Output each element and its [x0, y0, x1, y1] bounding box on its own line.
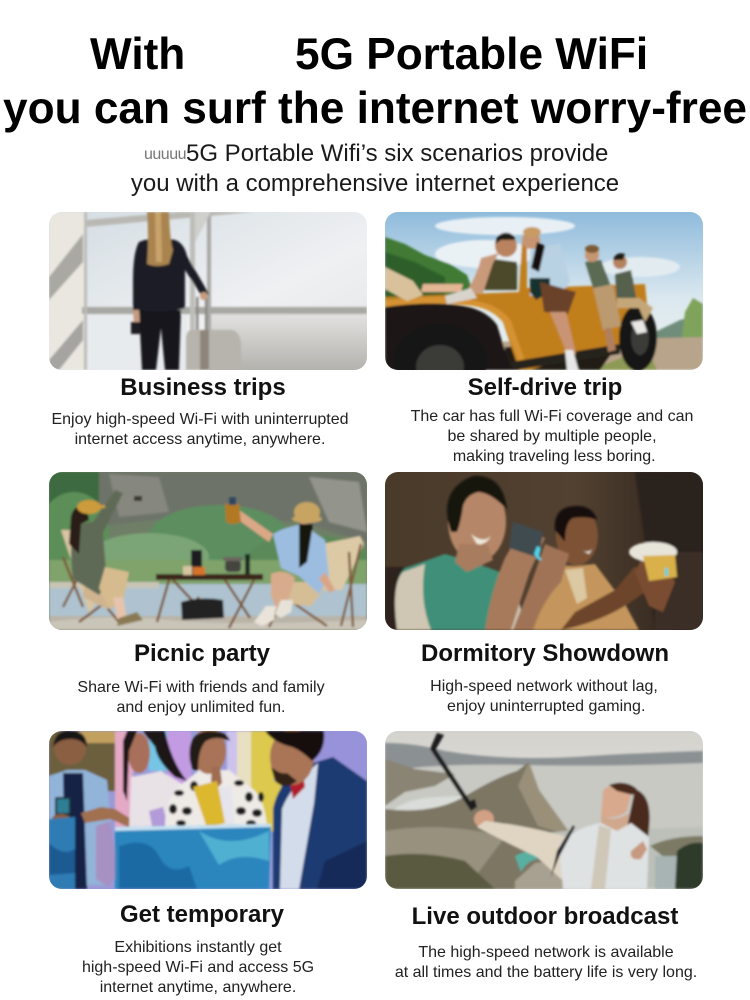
- photo: two friends gaming on phones: [385, 472, 703, 630]
- description: making traveling less boring.: [453, 448, 656, 465]
- jeep body: [385, 242, 651, 370]
- description: [51, 411, 349, 448]
- left chair: [61, 530, 95, 613]
- legs: [139, 310, 181, 370]
- jacket and arm: [133, 238, 209, 312]
- arms and hands: [485, 530, 545, 630]
- description: [411, 408, 693, 465]
- panel: dormitory showdown: [385, 472, 703, 715]
- heading: Dormitory Showdown: Dormitory Showdown: [421, 640, 669, 667]
- description: internet access anytime, anywhere.: [75, 431, 325, 448]
- heading: Self-drive trip: Self-drive trip: [468, 374, 622, 401]
- panel: self-drive trip: [385, 212, 703, 465]
- gaming phone left: [509, 522, 543, 558]
- hair: [147, 212, 173, 266]
- title: 5G Portable WiFi: [295, 30, 648, 79]
- description: [77, 679, 325, 716]
- description: and enjoy unlimited fun.: [116, 699, 286, 716]
- description: [395, 944, 697, 981]
- man 1: [395, 554, 523, 630]
- description: High-speed network without lag,: [430, 678, 658, 695]
- left woman: [71, 490, 123, 595]
- subtitle: uuuuu: [144, 146, 186, 163]
- woman in shirt: [530, 244, 570, 296]
- center woman: [165, 770, 267, 828]
- title: With: [90, 30, 185, 79]
- woman behind: [129, 771, 187, 832]
- panel: live outdoor broadcast: [385, 731, 703, 981]
- right chair: [320, 536, 364, 590]
- heading: Get temporary: Get temporary: [120, 901, 284, 928]
- title: you can surf the internet worry-free: [3, 84, 747, 133]
- description: The car has full Wi-Fi coverage and can: [411, 408, 693, 425]
- heading: Business trips: Business trips: [120, 374, 286, 401]
- reclining person: [385, 267, 423, 301]
- suitcase: [196, 297, 198, 332]
- heading: Picnic party: Picnic party: [134, 640, 270, 667]
- panel: picnic party: [49, 472, 367, 716]
- right phone and fan: [629, 542, 677, 562]
- panel: business trips: [49, 212, 367, 448]
- title: [3, 30, 747, 133]
- description: Share Wi-Fi with friends and family: [77, 679, 325, 696]
- description: high-speed Wi-Fi and access 5G: [82, 959, 314, 976]
- man in green: [479, 258, 517, 290]
- table and items: [156, 574, 263, 580]
- photo: traveller with suitcase at airport window: [49, 212, 367, 370]
- description: [82, 939, 314, 996]
- subtitle: [131, 140, 619, 197]
- photo: woman taking a selfie above a bay: [385, 731, 703, 889]
- description: enjoy uninterrupted gaming.: [447, 698, 645, 715]
- right man: [273, 757, 367, 889]
- description: Exhibitions instantly get: [114, 939, 282, 956]
- subtitle: you with a comprehensive internet experience: [131, 170, 619, 197]
- display counter: [115, 824, 271, 889]
- rear friends: [585, 260, 613, 300]
- description: be shared by multiple people,: [447, 428, 657, 445]
- photo: friends on an orange jeep: [385, 212, 703, 370]
- description: The high-speed network is available: [418, 944, 674, 961]
- description: [430, 678, 658, 715]
- photo: exhibition visitors around a blue display: [49, 731, 367, 889]
- description: internet anytime, anywhere.: [100, 979, 296, 996]
- heading: Live outdoor broadcast: Live outdoor broadcast: [412, 903, 678, 930]
- photo: friends toasting at a riverside table: [49, 472, 367, 630]
- left man: [49, 770, 111, 885]
- subtitle: 5G Portable Wifi’s six scenarios provide: [186, 140, 608, 167]
- man 2: [529, 564, 639, 630]
- panel: get temporary: [49, 731, 367, 996]
- right woman: [273, 524, 329, 594]
- woman: [474, 810, 494, 828]
- selfie stick: [430, 733, 477, 811]
- description: Enjoy high-speed Wi-Fi with uninterrupted: [51, 411, 349, 428]
- description: at all times and the battery life is very long.: [395, 964, 697, 981]
